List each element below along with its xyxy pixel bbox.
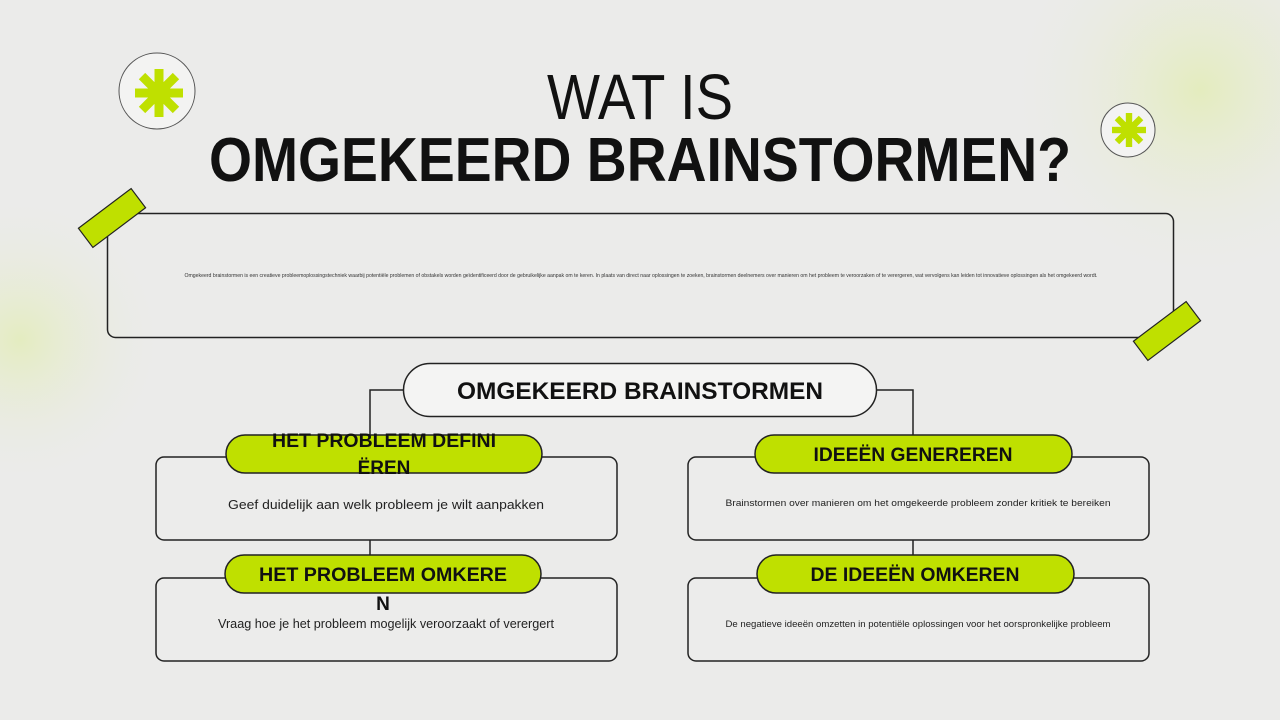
panel: step 1: ËREN: [358, 458, 410, 479]
connectors: [370, 390, 913, 556]
panel: step 1: HET PROBLEEM DEFINI: [272, 431, 496, 452]
icon: tape left: [78, 189, 146, 247]
title: WAT IS: [547, 61, 733, 133]
panel: step 3: Vraag hoe je het probleem mogelijk veroorzaakt of verergert: [218, 616, 554, 631]
icon: tape right: [1133, 302, 1201, 360]
panel: central pill: [404, 364, 876, 416]
panel: step 3: N: [376, 594, 390, 615]
panel: step 2: IDEEËN GENEREREN: [814, 445, 1012, 466]
panel: step 4: De negatieve ideeën omzetten in potentiële oplossingen voor het oorspronkelijke probleem: [726, 619, 1111, 630]
panel: step 2: [688, 435, 1149, 540]
panel: step 4: DE IDEEËN OMKEREN: [810, 565, 1020, 586]
panel: step 3: HET PROBLEEM OMKERE: [259, 565, 507, 586]
panel: step 1: [156, 431, 617, 540]
panel: step 1: Geef duidelijk aan welk probleem je wilt aanpakken: [228, 497, 544, 512]
title: [209, 61, 1071, 195]
icon: asterisk badge right: [1101, 103, 1155, 157]
panel: step 3: [156, 555, 617, 661]
icon: asterisk badge left: [119, 53, 195, 129]
panel: step 2: Brainstormen over manieren om het omgekeerde probleem zonder kritiek te bereiken: [726, 498, 1110, 509]
panel: central pill: OMGEKEERD BRAINSTORMEN: [457, 378, 823, 405]
title: OMGEKEERD BRAINSTORMEN?: [209, 126, 1071, 195]
text block: definition: Omgekeerd brainstormen is een creatieve probleemoplossingstechniek waarbij potentiële problemen of obstakels worden geïdentificeerd door de gebruikelijke aanpak om te keren. In plaats van direct naar oplossingen te zoeken, brainstormen deelnemers over manieren om het probleem te veroorzaken of te verergeren, wat vervolgens kan leiden tot innovatieve oplossingen als het omgekeerd wordt.: [184, 273, 1098, 279]
panel: step 4: [688, 555, 1149, 661]
panel: definition text box: [108, 214, 1174, 338]
